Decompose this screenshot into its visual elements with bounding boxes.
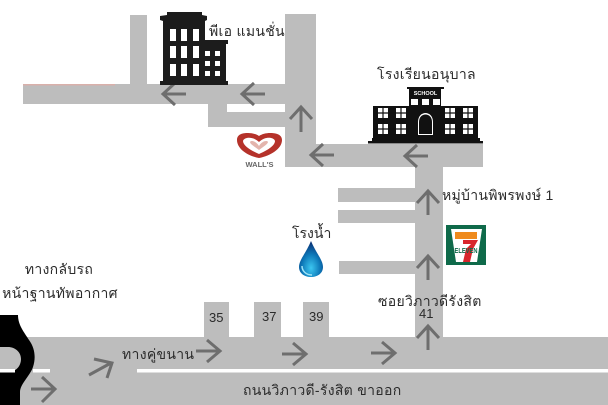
faded red edge [23,84,115,86]
label: PA Mansion: พีเอ แมนชั่น [209,22,285,39]
label: Air Force base: หน้าฐานทัพอากาศ [2,285,118,302]
label: main road: ถนนวิภาวดี-รังสิต ขาออก [243,382,402,398]
icon: 7-Eleven logo [446,225,486,265]
icon: Wall's logo: WALL'S [245,160,274,169]
label: Vibhavadi soi: ซอยวิภาวดีรังสิต [378,293,482,309]
label: kindergarten: โรงเรียนอนุบาล [377,66,476,83]
icon: apartment building [160,12,228,85]
soi numbers: 41 [419,306,433,321]
roundabout [0,315,35,405]
icon: school building [368,87,483,144]
soi numbers: 37 [262,309,276,324]
icon: Wall's logo [237,133,282,169]
soi numbers: 35 [209,310,223,325]
icon: 7-Eleven logo: ELEVEN [454,248,478,255]
direction arrows [31,83,439,402]
median line [0,369,608,372]
soi numbers: 39 [309,309,323,324]
label: return point: ทางกลับรถ [25,261,93,277]
label: frontage road: ทางคู่ขนาน [122,346,194,363]
label: water plant: โรงน้ำ [292,223,331,241]
icon: water drop [299,241,323,277]
soi numbers [209,306,433,325]
label: village: หมู่บ้านพิพรพงษ์ 1 [442,187,554,204]
icon: school building: SCHOOL [414,91,438,97]
